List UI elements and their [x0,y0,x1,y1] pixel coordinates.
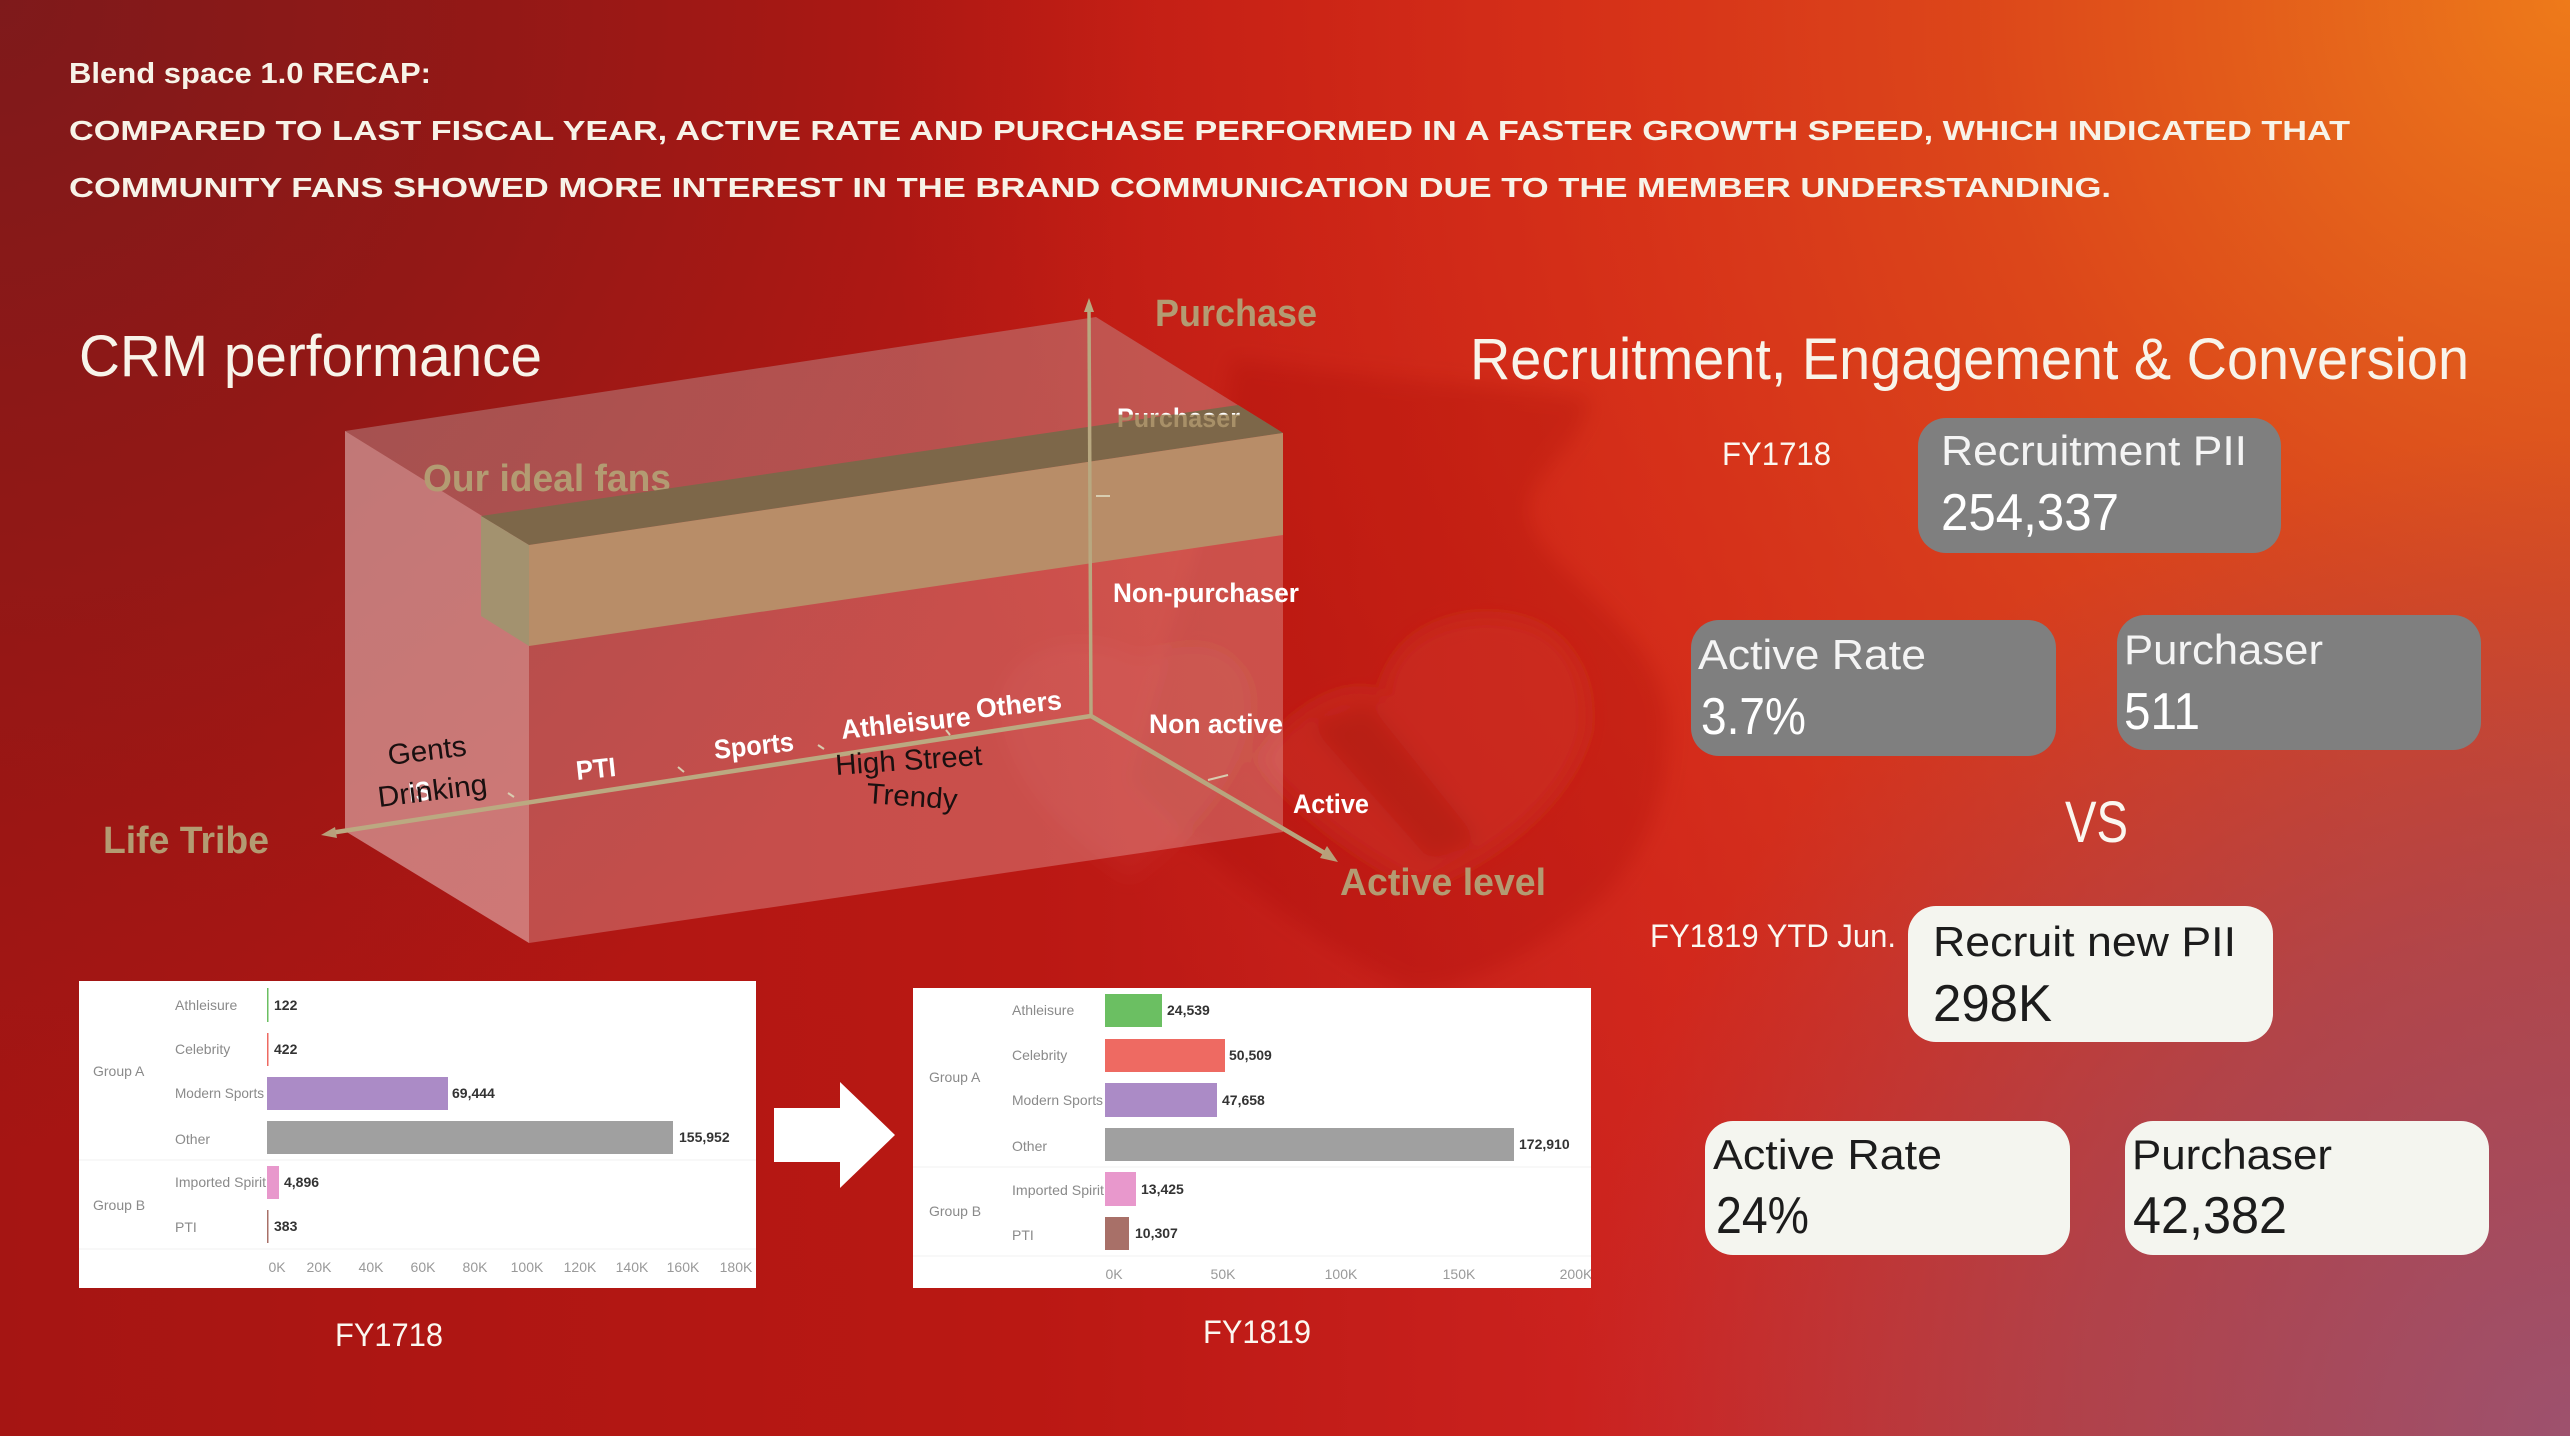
label: Others: Others [974,685,1063,724]
row: Other [175,1121,730,1154]
axis: life tribe [321,716,1091,838]
label: High Street: High Street [834,740,983,782]
label: VS: VS [2065,790,2128,855]
x axis labels: 0K [268,1259,286,1275]
x axis labels: 80K [463,1259,488,1275]
label: Athleisure: Athleisure [839,702,972,745]
label: FY1819 YTD period: FY1819 YTD Jun. [1650,918,1896,954]
chart: FY1819 bar chart [913,988,1593,1288]
row: Modern Sports [175,1077,495,1110]
caption: FY1718: FY1718 [335,1317,443,1353]
arrow: FY1718 to FY1819 [774,1082,895,1188]
row: Modern Sports: Modern Sports [1012,1092,1103,1108]
title block [69,58,2350,203]
heading: recap: Blend space 1.0 RECAP: [69,58,431,90]
row: Athleisure: 122 [274,997,298,1013]
x axis labels [268,1259,753,1275]
3D chart: CRM cube [103,293,1546,943]
row: Athleisure: Athleisure [175,997,237,1013]
x axis labels [1106,1270,1591,1279]
x axis labels: 140K [616,1259,649,1275]
label: Active level: Active level [1340,862,1546,904]
row: Modern Sports: 47,658 [1222,1092,1265,1108]
slab: front face [529,433,1283,646]
x axis labels: 200K [1560,1266,1593,1282]
caption: FY1819: FY1819 [1203,1314,1311,1350]
row: PTI: 383 [274,1218,298,1234]
row: PTI: PTI [1012,1227,1034,1243]
card: Active Rate FY1718: 3.7% [1701,688,1806,746]
watermark: heart and swirl [1000,359,1668,990]
row: Celebrity: 422 [274,1041,298,1057]
row: Modern Sports: 69,444 [452,1085,495,1101]
row: Other: Other [1012,1138,1047,1154]
label: Our ideal fans: Our ideal fans [423,458,671,500]
row: Celebrity: Celebrity [175,1041,230,1057]
chart: FY1819 bar chart: Group B [929,1203,981,1219]
row: Other: 172,910 [1519,1136,1570,1152]
row: Athleisure [175,988,298,1022]
chart: FY1819 bar chart: Group A [929,1069,981,1085]
label: Life Tribe: Life Tribe [103,820,269,862]
x axis labels: 100K [1325,1266,1358,1282]
row: Celebrity: Celebrity [1012,1047,1067,1063]
row: Other [1012,1128,1570,1161]
card: Active Rate FY1718: Active Rate [1698,631,1926,678]
card: Active Rate FY1819: Active Rate [1713,1131,1942,1178]
row: Other: 155,952 [679,1129,730,1145]
card: Recruitment PII FY1718: 254,337 [1941,484,2119,542]
card: Active Rate FY1819 [1705,1121,2070,1255]
row: PTI [1012,1217,1178,1250]
x axis labels: 120K [564,1259,597,1275]
card: Purchaser FY1819: 42,382 [2133,1187,2287,1245]
label: Non active: Non active [1149,709,1283,739]
card: Purchaser FY1819: Purchaser [2132,1131,2332,1178]
row: Athleisure: 24,539 [1167,1002,1210,1018]
label: Drinking: Drinking [376,769,489,814]
card: Purchaser FY1718: Purchaser [2124,626,2323,673]
cube: front face [529,433,1283,943]
label: Purchaser: Purchaser [1117,403,1240,433]
row: Imported Spirit [175,1166,319,1199]
x axis labels: 20K [307,1259,332,1275]
row: Athleisure: Athleisure [1012,1002,1074,1018]
x axis labels: 60K [411,1259,436,1275]
chart: FY1718 bar chart: Group B [93,1197,145,1213]
row: Imported Spirit: 13,425 [1141,1181,1184,1197]
label: IS: IS [407,775,433,808]
row: Celebrity [175,1033,298,1066]
card: Recruitment PII FY1718 [1918,418,2281,553]
row: Imported Spirit: Imported Spirit [1012,1182,1104,1198]
row: PTI: 10,307 [1135,1225,1178,1241]
recap line 1: COMPARED TO LAST FISCAL YEAR, ACTIVE RATE AND PURCHASE PERFORMED IN A FASTER GROWTH SPEED, WHICH INDICATED THAT [69,115,2350,146]
card: Recruit new PII FY1819 [1908,906,2273,1042]
row: Celebrity [1012,1039,1272,1072]
x axis labels: 150K [1443,1266,1476,1282]
cube: left face [345,431,529,943]
axis: active level [1091,716,1338,862]
x axis labels: 160K [667,1259,700,1275]
label: FY1718 period: FY1718 [1722,436,1831,472]
chart: FY1718 bar chart: Group A [93,1063,145,1079]
card: Purchaser FY1718: 511 [2124,683,2200,741]
x axis labels: 40K [359,1259,384,1275]
label: Gents: Gents [386,731,468,772]
card: Recruitment PII FY1718: Recruitment PII [1941,427,2247,474]
label: Sports: Sports [712,727,795,765]
card: Active Rate FY1819: 24% [1716,1187,1809,1245]
slab: left face [481,516,529,646]
row: Modern Sports: Modern Sports [175,1085,264,1101]
row: Imported Spirit [1012,1172,1184,1206]
label: PTI: PTI [574,752,617,786]
axis: purchase [1084,298,1094,716]
card: Active Rate FY1718 [1691,620,2056,756]
heading: CRM performance: CRM performance [79,324,542,389]
x axis labels: 0K [1105,1266,1123,1282]
label: Non-purchaser: Non-purchaser [1113,578,1299,608]
cube: top face [345,317,1283,545]
row: Celebrity: 50,509 [1229,1047,1272,1063]
x axis labels: 100K [511,1259,544,1275]
card: Purchaser FY1718 [2117,615,2481,750]
chart panel [913,988,1591,1288]
row: Imported Spirit: Imported Spirit [175,1174,266,1190]
card: Recruit new PII FY1819: Recruit new PII [1933,918,2236,965]
heading: Recruitment, Engagement & Conversion: Recruitment, Engagement & Conversion [1470,327,2469,392]
row: Modern Sports [1012,1083,1265,1117]
x axis labels: 180K [720,1259,753,1275]
chart: FY1718 bar chart [79,981,756,1288]
x axis labels: 50K [1211,1266,1236,1282]
recap line 2: COMMUNITY FANS SHOWED MORE INTEREST IN THE BRAND COMMUNICATION DUE TO THE MEMBER UNDERSTANDING. [69,172,2111,203]
label: Active: Active [1293,789,1369,819]
row: PTI [175,1210,298,1243]
row: Imported Spirit: 4,896 [284,1174,319,1190]
card: Recruit new PII FY1819: 298K [1933,975,2052,1033]
label: Trendy: Trendy [866,778,959,816]
row: PTI: PTI [175,1219,197,1235]
chart panel [79,981,756,1288]
card: Purchaser FY1819 [2125,1121,2489,1255]
label: Purchase: Purchase [1155,293,1317,335]
row: Other: Other [175,1131,210,1147]
slab: top face [481,405,1283,545]
axis tick marks [508,496,1228,797]
row: Athleisure [1012,994,1210,1027]
